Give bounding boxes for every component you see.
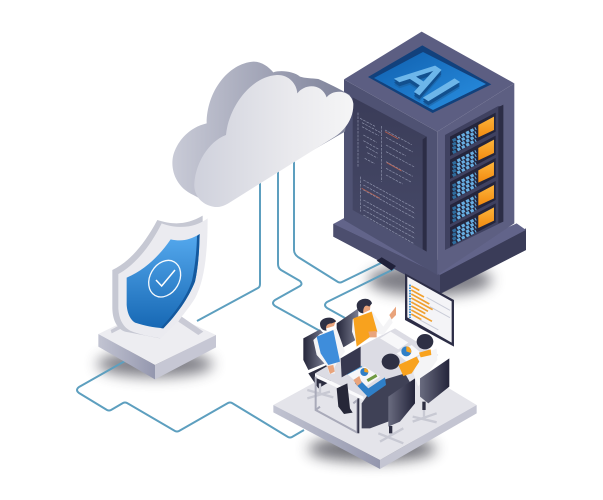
server tower <box>333 32 526 293</box>
AI lettering: AI <box>383 53 473 109</box>
AI screen frame <box>368 45 491 113</box>
AI lettering: AI <box>383 57 473 113</box>
rack units <box>445 105 503 250</box>
cloud front <box>194 75 353 207</box>
server body <box>344 32 514 275</box>
cable port <box>377 257 396 271</box>
shield front <box>118 218 208 338</box>
code panel <box>353 97 427 252</box>
team meeting platform <box>273 273 477 469</box>
AI lettering: AI <box>383 59 473 115</box>
person: blue vest <box>313 318 345 374</box>
shadow: team platform <box>308 436 436 462</box>
shadow: shield base <box>97 351 213 377</box>
rack 4 <box>450 181 496 224</box>
shield blue <box>127 234 200 328</box>
table <box>315 328 438 433</box>
AI screen <box>374 52 486 110</box>
shield blue inner edge <box>161 234 200 328</box>
cloud <box>172 62 353 207</box>
rack 5 <box>450 203 496 247</box>
rack 3 <box>450 158 496 201</box>
AI lettering: AI <box>383 55 473 111</box>
person: orange vest <box>352 299 396 347</box>
shadow: server <box>368 264 492 296</box>
wall monitor <box>405 273 454 347</box>
security shield on base <box>98 216 216 379</box>
connection lines <box>77 160 394 438</box>
server base <box>333 217 526 293</box>
chair: front <box>378 378 415 443</box>
laptop <box>341 347 361 377</box>
shield back <box>112 216 203 338</box>
person: front with blue sleeve <box>353 354 413 428</box>
person: blue vest legs <box>337 383 353 414</box>
rack 2 <box>450 136 496 179</box>
rack 1 <box>450 113 496 156</box>
platform <box>273 347 477 469</box>
shield base <box>98 307 216 379</box>
cloud back <box>172 62 350 207</box>
chair: back left <box>303 308 358 398</box>
person: right with orange sleeve <box>398 334 437 387</box>
check badge <box>142 255 187 303</box>
chair: right <box>413 358 449 422</box>
